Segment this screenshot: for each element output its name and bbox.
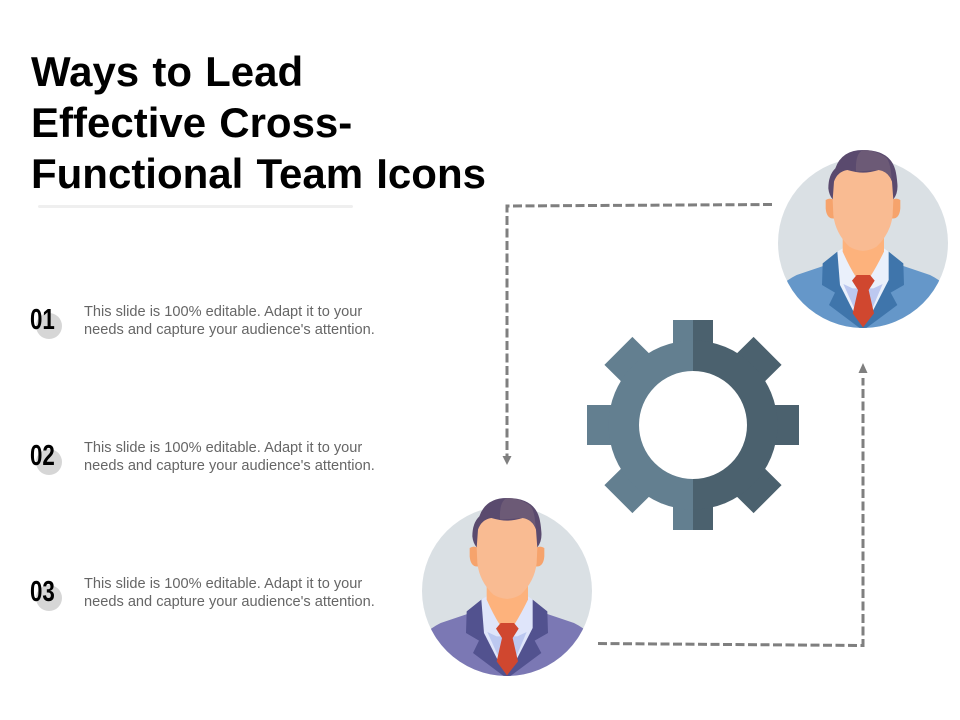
number 01: 01 [30, 304, 55, 336]
icon: person in purple suit [422, 498, 592, 688]
item text [84, 440, 375, 474]
number badge circle [36, 585, 62, 611]
list item 02 [30, 440, 375, 475]
number 03: 03 [30, 576, 55, 608]
item text: This slide is 100% editable. Adapt it to your [84, 576, 362, 592]
item text: This slide is 100% editable. Adapt it to your [84, 304, 362, 320]
title [31, 48, 486, 197]
item text [84, 304, 375, 338]
title underline [38, 205, 353, 208]
title: Ways to Lead [31, 48, 303, 95]
item text: needs and capture your audience's attention. [84, 594, 375, 610]
item text: This slide is 100% editable. Adapt it to your [84, 440, 362, 456]
list item 01 [30, 304, 375, 339]
number 02: 02 [30, 440, 55, 472]
number badge circle [36, 313, 62, 339]
title: Effective Cross- [31, 99, 352, 146]
title: Functional Team Icons [31, 150, 486, 197]
number badge circle [36, 449, 62, 475]
item text: needs and capture your audience's attention. [84, 458, 375, 474]
item text: needs and capture your audience's attention. [84, 322, 375, 338]
list item 03 [30, 576, 375, 611]
dashed arrow: top person to bottom person [502, 204, 772, 465]
dashed arrow: bottom person to top person [598, 363, 868, 646]
icon: person in blue suit [778, 150, 948, 340]
item text [84, 576, 375, 610]
icon: gear [587, 320, 799, 530]
